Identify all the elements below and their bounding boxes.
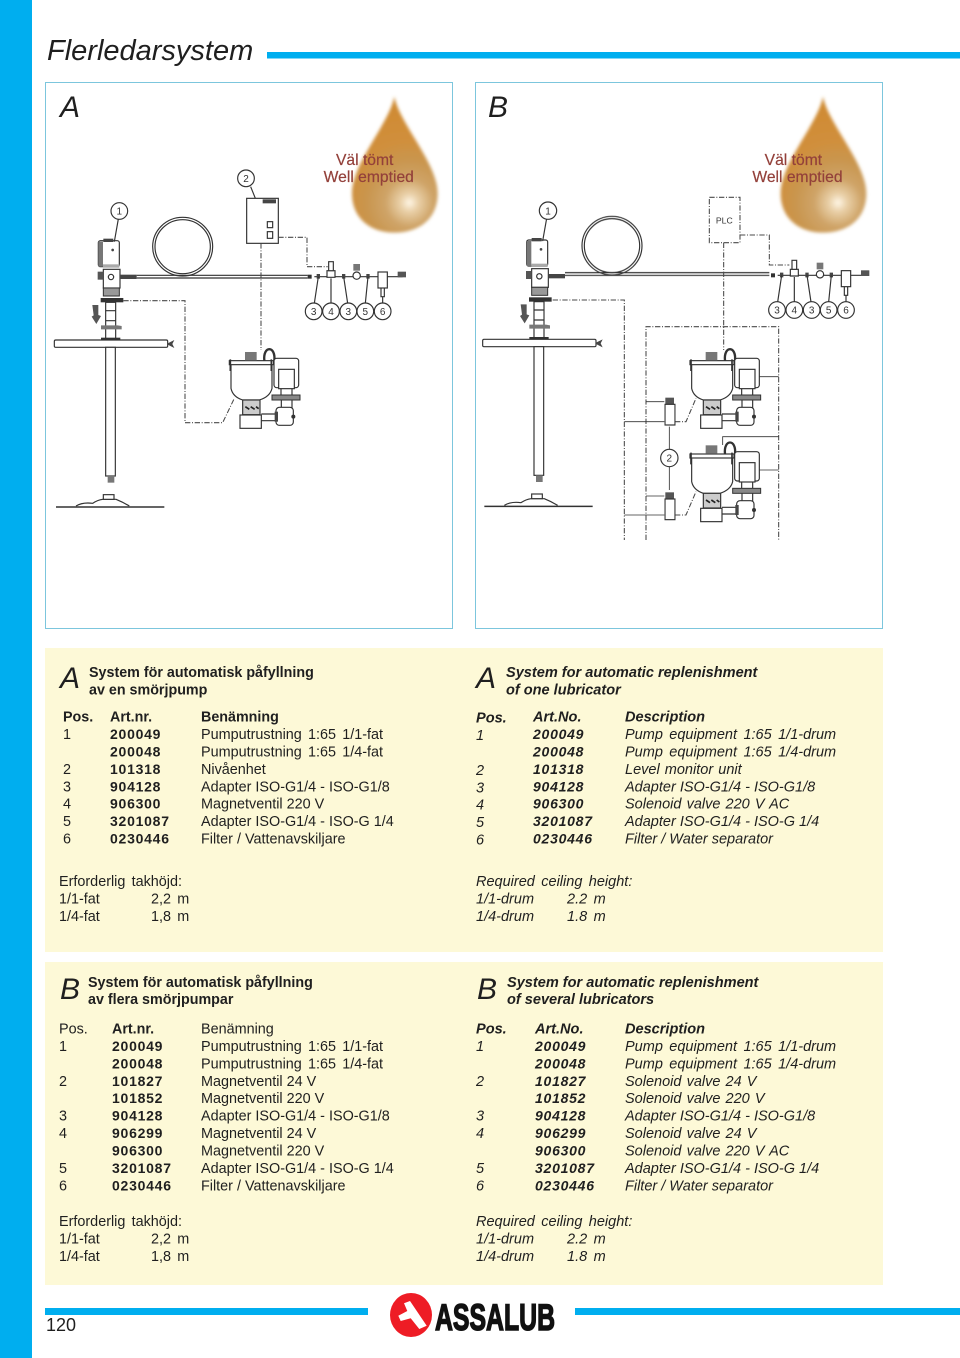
table: B English: 1 (476, 1039, 484, 1055)
signal lines (553, 235, 789, 540)
icon: oil drop (781, 97, 866, 233)
PLC box: PLC (716, 216, 733, 226)
table: B Swedish: Pumputrustning 1:65 1/1-fat (201, 1039, 383, 1055)
callout 1: 1 (545, 206, 551, 217)
table: A Swedish: Filter / Vattenavskiljare (201, 832, 346, 848)
table: B Swedish: 5 (59, 1161, 67, 1177)
diagram A drawing (54, 97, 438, 507)
label: A: A (58, 91, 80, 124)
heading: A English: of one lubricator (506, 682, 622, 698)
table: B English: Pump equipment 1:65 1/1-drum (625, 1039, 836, 1055)
table: A English: Level monitor unit (625, 762, 743, 778)
table: B English: 5 (476, 1161, 485, 1177)
table: A English: 101318 (533, 761, 584, 777)
table: B English: Description (625, 1022, 705, 1038)
footer bar left (45, 1308, 368, 1315)
drop caption (324, 152, 414, 186)
table: B Swedish: 0230446 (112, 1178, 172, 1194)
table: B English: Solenoid valve 24 V (625, 1126, 758, 1142)
ceiling height: B Swedish: 1/4-fat (59, 1249, 100, 1265)
table: A English: 0230446 (533, 830, 593, 846)
table: A English: 6 (476, 832, 485, 848)
table: A English: Solenoid valve 220 V AC (625, 796, 790, 812)
signal lines (123, 237, 328, 423)
icon: oil drop (352, 97, 438, 233)
accessories row: 5 (826, 306, 832, 317)
table: B Swedish: Magnetventil 220 V (201, 1091, 325, 1107)
heading: B English (477, 973, 760, 1008)
table: B Swedish: 200048 (112, 1056, 163, 1072)
table: A Swedish: 4 (63, 796, 71, 812)
ceiling height: A English: 1/1-drum (476, 892, 534, 908)
drop caption (752, 152, 843, 186)
table: A Swedish: Magnetventil 220 V (201, 796, 325, 812)
table: A English: Adapter ISO-G1/4 - ISO-G 1/4 (624, 814, 819, 830)
ceiling height: B Swedish (59, 1214, 189, 1265)
table: A English: 906300 (533, 796, 584, 812)
heading: B Swedish: System för automatisk påfyllning (88, 975, 313, 991)
ceiling height: A Swedish: Erforderlig takhöjd: (59, 874, 182, 890)
callout 2 (238, 170, 254, 187)
table: A English: 200048 (532, 744, 584, 760)
drop caption: Väl tömt (765, 152, 823, 169)
table: B English: 906300 (535, 1142, 586, 1158)
table: A English: Pos. (476, 710, 507, 726)
accessories row: 4 (328, 307, 334, 318)
ceiling height: A English: Required ceiling height: (476, 874, 632, 890)
logo: Assalub: ASSALUB (435, 1297, 555, 1338)
table: B Swedish: 1 (59, 1039, 67, 1055)
table: B Swedish: Filter / Vattenavskiljare (201, 1178, 346, 1194)
table: B Swedish: 101852 (112, 1090, 163, 1106)
wiring (624, 377, 779, 515)
table: A Swedish: Nivåenhet (201, 762, 266, 778)
table: A Swedish: Art.nr. (110, 710, 152, 726)
table: B English: 101827 (535, 1073, 587, 1089)
accessories row (305, 262, 406, 320)
table: B Swedish: Adapter ISO-G1/4 - ISO-G1/8 (201, 1108, 390, 1124)
table: A Swedish: 1 (63, 727, 71, 743)
table: A Swedish: 200049 (110, 726, 161, 742)
title: Flerledarsystem (47, 35, 253, 67)
table: B English: 6 (476, 1178, 485, 1194)
table: A English: Filter / Water separator (625, 832, 774, 848)
logo: Assalub (390, 1293, 555, 1338)
heading: A Swedish: av en smörjpump (89, 682, 208, 698)
table: B English: 2 (475, 1074, 484, 1090)
table: B Swedish: Magnetventil 24 V (201, 1074, 317, 1090)
heading: A English (474, 662, 759, 698)
ceiling height: A Swedish (59, 874, 189, 925)
table: B English: Pos. (476, 1022, 507, 1038)
table: A Swedish: Adapter ISO-G1/4 - ISO-G1/8 (201, 780, 390, 796)
ceiling height: B English: Required ceiling height: (476, 1214, 632, 1230)
ceiling height: B Swedish: 1/1-fat (59, 1232, 100, 1248)
table: B Swedish: 904128 (112, 1108, 163, 1124)
table: A Swedish: 3201087 (110, 813, 170, 829)
lubricator 2 (690, 442, 761, 522)
ceiling height: B English (476, 1214, 632, 1265)
callout 2: 2 (243, 174, 249, 185)
panel: system A tables (45, 648, 883, 952)
drop caption: Väl tömt (336, 152, 394, 169)
panel: diagram B (476, 82, 882, 628)
sidebar (0, 0, 32, 1358)
table: A English: 4 (476, 798, 484, 814)
table: B Swedish: 200049 (112, 1038, 163, 1054)
table: A Swedish: Pumputrustning 1:65 1/1-fat (201, 727, 383, 743)
table: B Swedish: Pumputrustning 1:65 1/4-fat (201, 1056, 383, 1072)
table: A English: 3201087 (533, 813, 593, 829)
table: B English: Adapter ISO-G1/4 - ISO-G 1/4 (624, 1161, 819, 1177)
PLC box (709, 197, 740, 243)
table: B Swedish: Adapter ISO-G1/4 - ISO-G 1/4 (201, 1161, 394, 1177)
heading: B Swedish (60, 973, 313, 1008)
heading: B Swedish: av flera smörjpumpar (88, 992, 234, 1008)
table: A English: 904128 (533, 778, 584, 794)
accessories row: 5 (363, 307, 369, 318)
table: B Swedish: Pos. (59, 1022, 88, 1038)
ceiling height: A English: 1/4-drum (476, 909, 534, 925)
callout 1 (539, 202, 557, 219)
heading: B English: System for automatic replenishment (507, 975, 760, 991)
ceiling height: B English: 1.8 m (567, 1249, 606, 1265)
table: B Swedish: 6 (59, 1178, 67, 1194)
panel: diagram A (46, 82, 452, 628)
table: A English: 5 (476, 815, 485, 831)
heading: B English: B (477, 973, 497, 1006)
table: A Swedish: Pos. (63, 710, 93, 726)
ceiling height: A Swedish: 2,2 m (151, 892, 189, 908)
table: A Swedish: 6 (63, 832, 71, 848)
table: A Swedish: 906300 (110, 796, 161, 812)
table: B English: 4 (476, 1126, 484, 1142)
heading: A English: System for automatic replenishment (506, 665, 759, 681)
label: B: B (488, 91, 508, 124)
drop caption: Well emptied (752, 169, 843, 186)
table: B Swedish: Magnetventil 220 V (201, 1144, 325, 1160)
callout 1 (111, 203, 128, 219)
table: A English: Pump equipment 1:65 1/1-drum (625, 727, 836, 743)
accessories row: 3 (809, 306, 815, 317)
ceiling height: A English (476, 874, 632, 925)
level monitor box (247, 187, 278, 243)
table: A Swedish: Benämning (201, 710, 279, 726)
table: A English: Pump equipment 1:65 1/4-drum (625, 744, 836, 760)
table: A Swedish: 200048 (110, 744, 161, 760)
table: B English (475, 1022, 836, 1194)
table: B Swedish: 3 (59, 1108, 67, 1124)
footer bar right (575, 1308, 960, 1315)
table: A Swedish (63, 710, 394, 848)
pump assembly (483, 216, 769, 506)
table: B Swedish: Art.nr. (112, 1022, 154, 1038)
panel: system B tables (45, 962, 883, 1285)
drop caption: Well emptied (324, 169, 414, 186)
accessories row: 3 (774, 306, 780, 317)
ceiling height: A Swedish: 1,8 m (151, 909, 189, 925)
table: B Swedish: 3201087 (112, 1160, 172, 1176)
ceiling height: B Swedish: 1,8 m (151, 1249, 189, 1265)
header bar (267, 52, 960, 58)
table: B Swedish: Magnetventil 24 V (201, 1126, 317, 1142)
table: B Swedish (59, 1022, 394, 1194)
table: B English: Pump equipment 1:65 1/4-drum (625, 1056, 836, 1072)
table: B Swedish: 101827 (112, 1073, 163, 1089)
table: A English: Adapter ISO-G1/4 - ISO-G1/8 (624, 780, 815, 796)
table: B Swedish: 4 (59, 1126, 67, 1142)
table: B English: Adapter ISO-G1/4 - ISO-G1/8 (624, 1108, 815, 1124)
table: A English: Art.No. (532, 710, 582, 726)
ceiling height: B English: 1/4-drum (476, 1249, 534, 1265)
accessories row: 6 (380, 307, 386, 318)
table: A Swedish: Adapter ISO-G1/4 - ISO-G 1/4 (201, 814, 394, 830)
ceiling height: B Swedish: Erforderlig takhöjd: (59, 1214, 182, 1230)
table: B English: Solenoid valve 220 V AC (625, 1144, 790, 1160)
table: A Swedish: 2 (63, 762, 71, 778)
diagram B drawing (483, 97, 869, 540)
table: A English: 200049 (532, 726, 584, 742)
heading: A Swedish: A (58, 662, 80, 695)
ceiling height: A English: 2.2 m (566, 892, 606, 908)
solenoid valves (665, 398, 675, 520)
table: A English: 3 (476, 780, 484, 796)
ceiling height: A Swedish: 1/4-fat (59, 909, 100, 925)
ceiling height: A English: 1.8 m (567, 909, 606, 925)
callout 2 (661, 449, 678, 467)
table: B English: 3201087 (535, 1160, 595, 1176)
table: B Swedish: 2 (59, 1074, 67, 1090)
table: B English: 101852 (535, 1090, 586, 1106)
table: B English: Filter / Water separator (625, 1178, 774, 1194)
table: B English: 3 (476, 1108, 484, 1124)
lubricator 1 (690, 349, 761, 428)
table: B English: 906299 (535, 1125, 586, 1141)
table: A English (475, 710, 836, 848)
ceiling height: B English: 1/1-drum (476, 1232, 534, 1248)
table: A Swedish: 101318 (110, 761, 161, 777)
ceiling height: B Swedish: 2,2 m (151, 1232, 189, 1248)
table: B English: Solenoid valve 24 V (625, 1074, 758, 1090)
table: A Swedish: 0230446 (110, 830, 170, 846)
table: A Swedish: Pumputrustning 1:65 1/4-fat (201, 744, 383, 760)
heading: B English: of several lubricators (507, 992, 654, 1008)
table: B English: Solenoid valve 220 V (625, 1091, 766, 1107)
accessories row: 3 (311, 307, 317, 318)
table: A English: Description (625, 710, 705, 726)
table: B Swedish: 906299 (112, 1125, 163, 1141)
ceiling height: B English: 2.2 m (566, 1232, 606, 1248)
accessories row: 4 (792, 306, 798, 317)
heading: A Swedish: System för automatisk påfyllning (89, 665, 314, 681)
accessories row (769, 260, 869, 318)
table: B English: 200048 (534, 1056, 586, 1072)
heading: B Swedish: B (60, 973, 80, 1006)
table: B Swedish: Benämning (201, 1022, 274, 1038)
heading: A English: A (474, 662, 496, 695)
table: A Swedish: 904128 (110, 778, 161, 794)
table: B English: 0230446 (535, 1178, 595, 1194)
page number: 120 (46, 1315, 76, 1335)
table: A English: 2 (475, 763, 484, 779)
heading: A Swedish (58, 662, 314, 698)
accessories row: 3 (346, 307, 352, 318)
ceiling height: A Swedish: 1/1-fat (59, 892, 100, 908)
table: B Swedish: 906300 (112, 1142, 163, 1158)
table: A Swedish: 5 (63, 814, 71, 830)
callout 1: 1 (117, 207, 123, 218)
callout 2: 2 (667, 454, 673, 465)
table: B English: 904128 (535, 1108, 586, 1124)
accessories row: 6 (843, 306, 849, 317)
pump assembly (54, 217, 308, 507)
table: A Swedish: 3 (63, 780, 71, 796)
table: A English: 1 (476, 728, 484, 744)
table: B English: Art.No. (534, 1022, 584, 1038)
lubricator (229, 349, 300, 428)
table: B English: 200049 (534, 1038, 586, 1054)
